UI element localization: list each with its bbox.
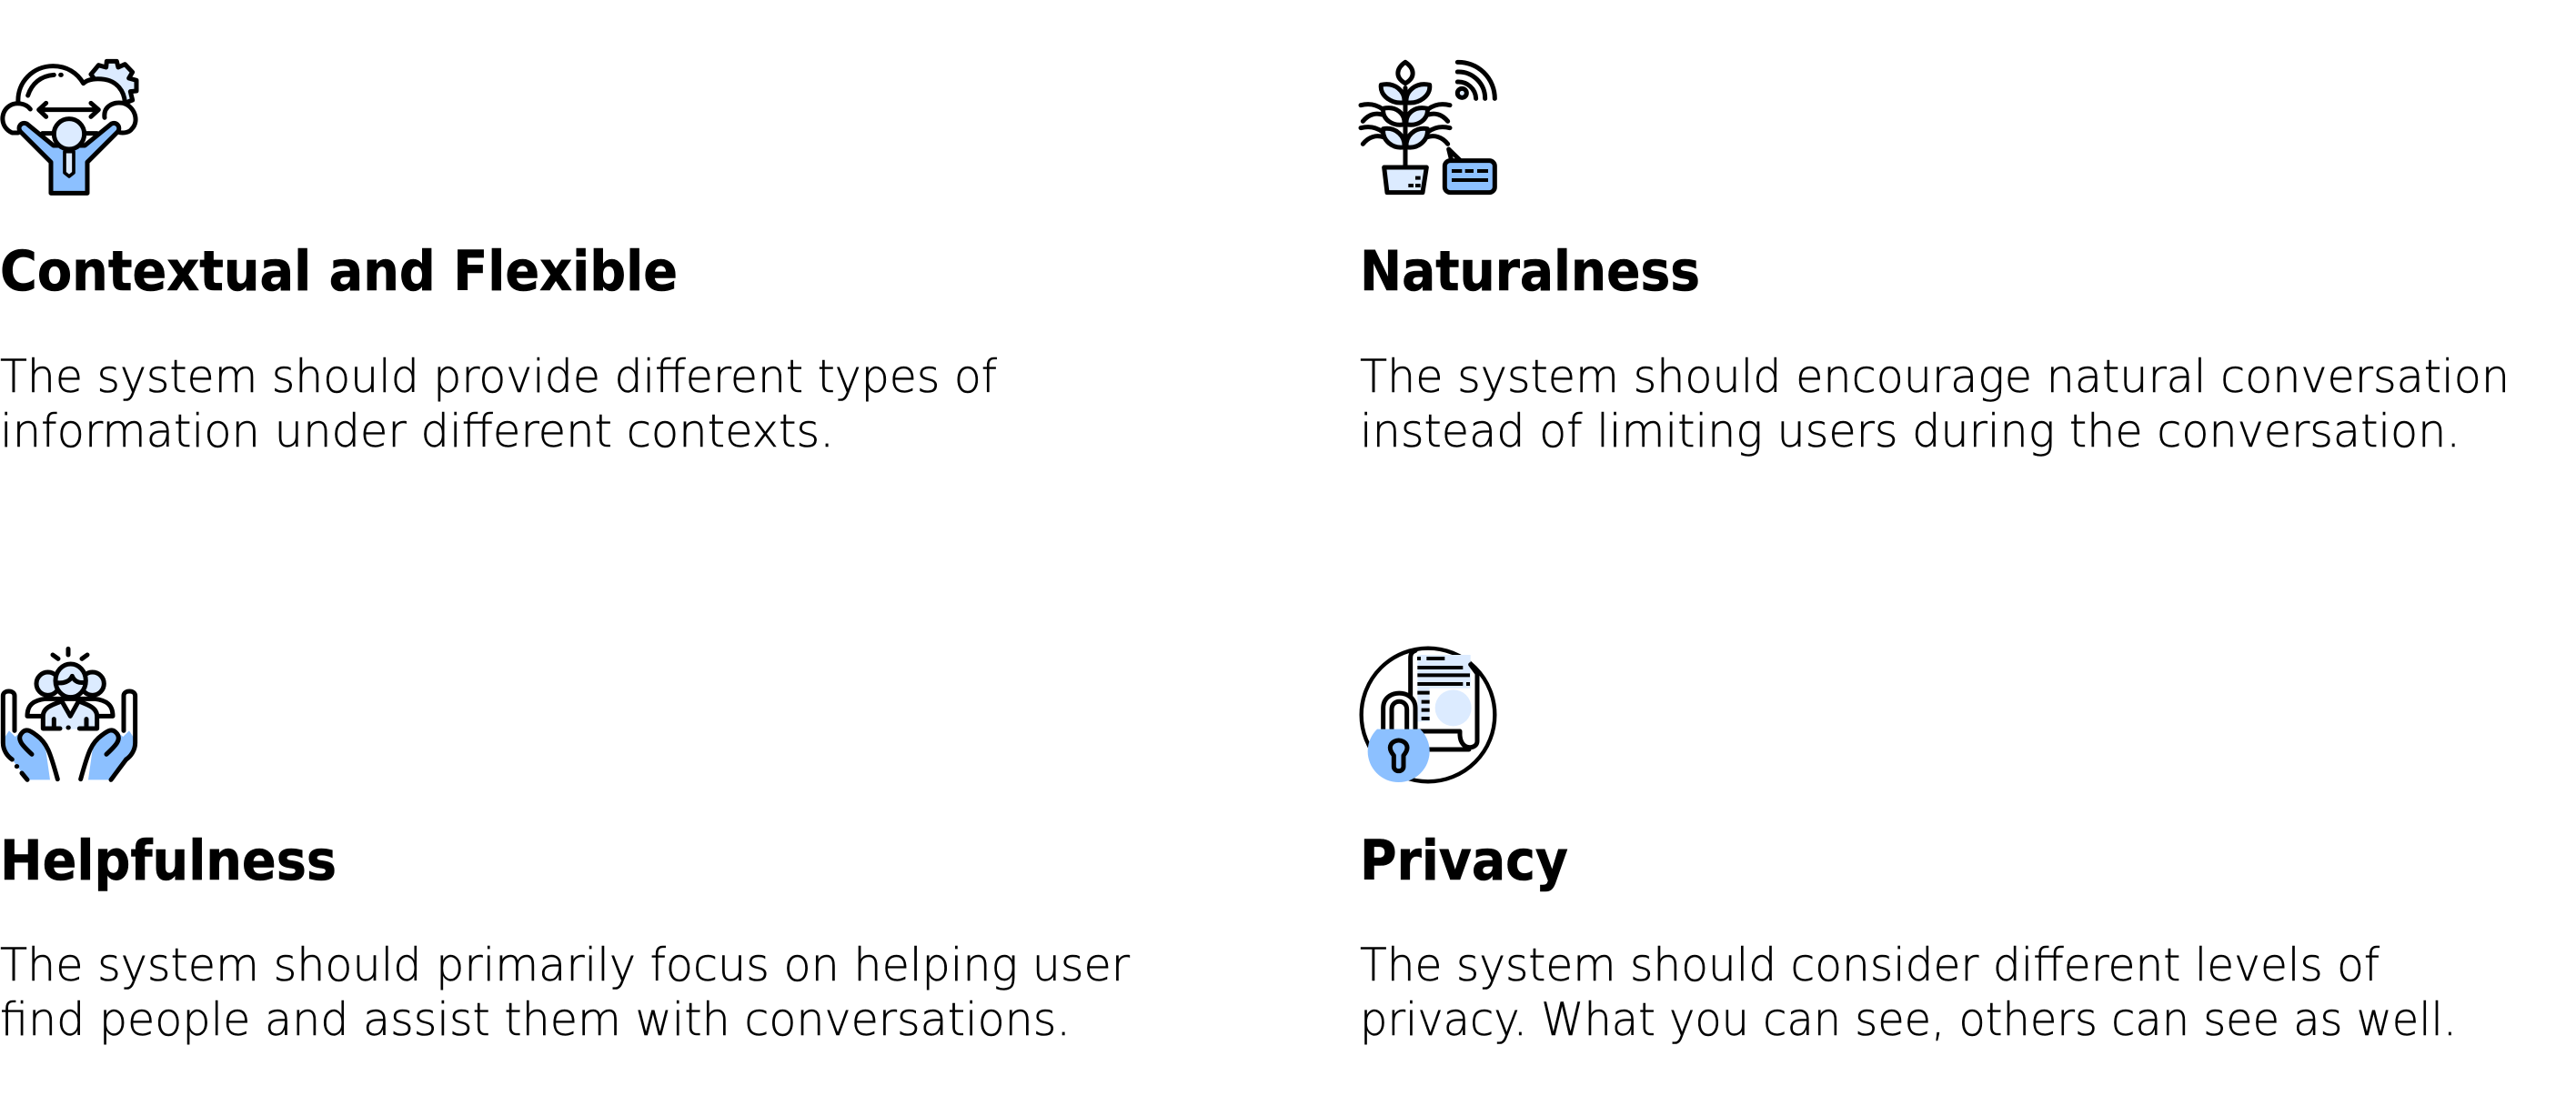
text: contextual description: information under different contexts. (0, 405, 834, 457)
heading: privacy: Privacy (1360, 829, 1568, 893)
heading: helpfulness: Helpfulness (0, 829, 337, 893)
icon: document and padlock (1362, 649, 1494, 782)
text: naturalness description (1360, 350, 2510, 457)
text: naturalness description: instead of limiting users during the conversation. (1360, 405, 2460, 457)
icon: plant with wifi and chat (1361, 62, 1494, 193)
text: contextual description (0, 350, 997, 457)
text: helpfulness description (0, 939, 1130, 1046)
text: helpfulness description: find people and assist them with conversations. (0, 993, 1071, 1046)
text: helpfulness description: The system should primarily focus on helping user (0, 939, 1130, 991)
panel: naturalness (1360, 62, 2510, 457)
panel: privacy (1360, 649, 2457, 1046)
heading: naturalness: Naturalness (1360, 239, 1700, 304)
panel: contextual and flexible (0, 61, 997, 457)
text: naturalness description: The system should encourage natural conversation (1360, 350, 2510, 403)
text: contextual description: The system should provide different types of (0, 350, 997, 403)
icon: person lifting cloud with gear (3, 61, 136, 193)
text: privacy description (1360, 939, 2457, 1046)
icon: hands holding people (3, 649, 136, 779)
text: privacy description: privacy. What you can see, others can see as well. (1360, 993, 2457, 1046)
text: privacy description: The system should consider different levels of (1360, 939, 2380, 991)
heading: contextual and flexible: Contextual and Flexible (0, 239, 678, 304)
panel: helpfulness (0, 649, 1130, 1046)
